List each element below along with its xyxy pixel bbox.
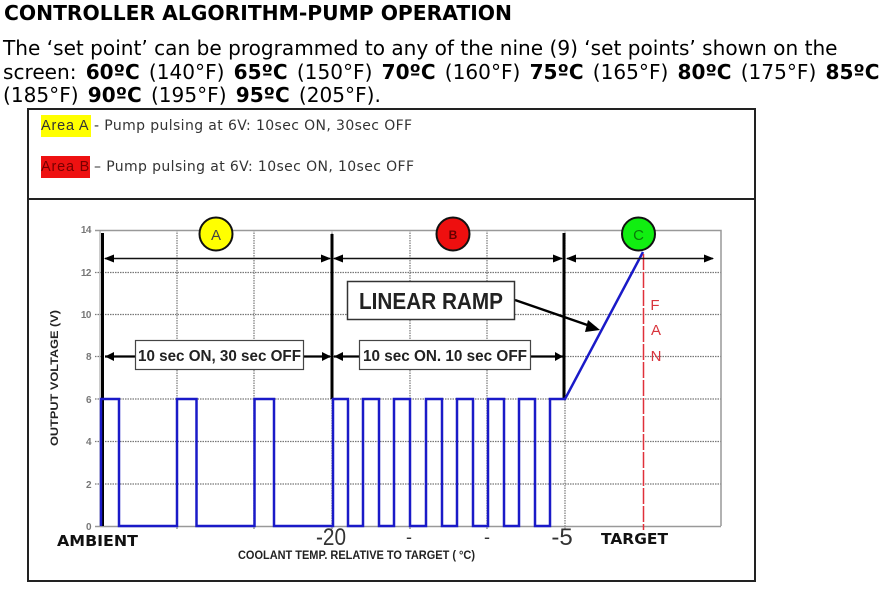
fan label: A: [651, 322, 661, 339]
y axis title: OUTPUT VOLTAGE (V): [49, 310, 61, 446]
area B interval label: 10 sec ON. 10 sec OFF: [363, 348, 527, 365]
zone marker C: C: [633, 227, 644, 244]
zone marker A: A: [211, 227, 221, 244]
legend: area B description: – Pump pulsing at 6V: 10sec ON, 10sec OFF: [94, 159, 414, 175]
legend: area A swatch: Area A: [41, 118, 89, 134]
x axis labels: [57, 524, 669, 551]
zone marker A: [200, 218, 232, 250]
legend: area B swatch: Area B: [41, 159, 90, 175]
y axis tick labels: 8: [86, 352, 92, 363]
zone dividers: [102, 233, 564, 526]
y axis tick labels: [81, 225, 92, 533]
zone marker B: [436, 218, 470, 250]
intro paragraph: (185°F) 90ºC (195°F) 95ºC (205°F).: [3, 83, 381, 107]
linear ramp label: LINEAR RAMP: [359, 288, 503, 314]
y axis tick labels: 4: [86, 437, 92, 448]
intro paragraph: The ‘set point’ can be programmed to any of the nine (9) ‘set points’ shown on the: [3, 36, 838, 60]
pump pulse waveform: [101, 252, 643, 526]
area B interval label: [334, 340, 563, 370]
x axis labels: -20: [316, 524, 346, 551]
x axis labels: -: [484, 527, 490, 547]
x axis title: COOLANT TEMP. RELATIVE TO TARGET ( °C): [238, 548, 475, 562]
fan label: N: [651, 348, 661, 365]
zone marker C: [622, 218, 655, 250]
intro paragraph: [2, 36, 879, 107]
zone marker B: B: [449, 228, 458, 242]
x axis labels: TARGET: [601, 530, 669, 548]
y axis tick labels: 2: [86, 480, 92, 491]
fan label: F: [650, 297, 660, 314]
fan target line: [642, 254, 644, 530]
legend: area A description: - Pump pulsing at 6V: 10sec ON, 30sec OFF: [94, 118, 412, 134]
area A interval label: 10 sec ON, 30 sec OFF: [138, 348, 301, 365]
linear ramp arrow: [515, 300, 600, 332]
area A interval label: [105, 340, 331, 370]
y axis tick labels: 12: [81, 268, 92, 279]
x axis labels: AMBIENT: [57, 532, 138, 550]
x axis labels: -5: [551, 524, 573, 551]
y axis tick labels: 6: [86, 395, 92, 406]
chart panel: [27, 200, 756, 582]
fan label: [650, 297, 661, 365]
linear ramp label: [348, 282, 514, 320]
zone span arrows: [105, 258, 713, 260]
intro paragraph: screen: 60ºC (140°F) 65ºC (150°F) 70ºC (160°F) 75ºC (165°F) 80ºC (175°F) 85ºC: [3, 60, 879, 84]
legend box: [27, 108, 756, 200]
y axis tick labels: 10: [81, 310, 92, 321]
title: CONTROLLER ALGORITHM-PUMP OPERATION: [4, 1, 512, 25]
y axis tick labels: 14: [81, 225, 92, 236]
y axis tick labels: 0: [86, 522, 92, 533]
x axis labels: -: [406, 527, 412, 547]
